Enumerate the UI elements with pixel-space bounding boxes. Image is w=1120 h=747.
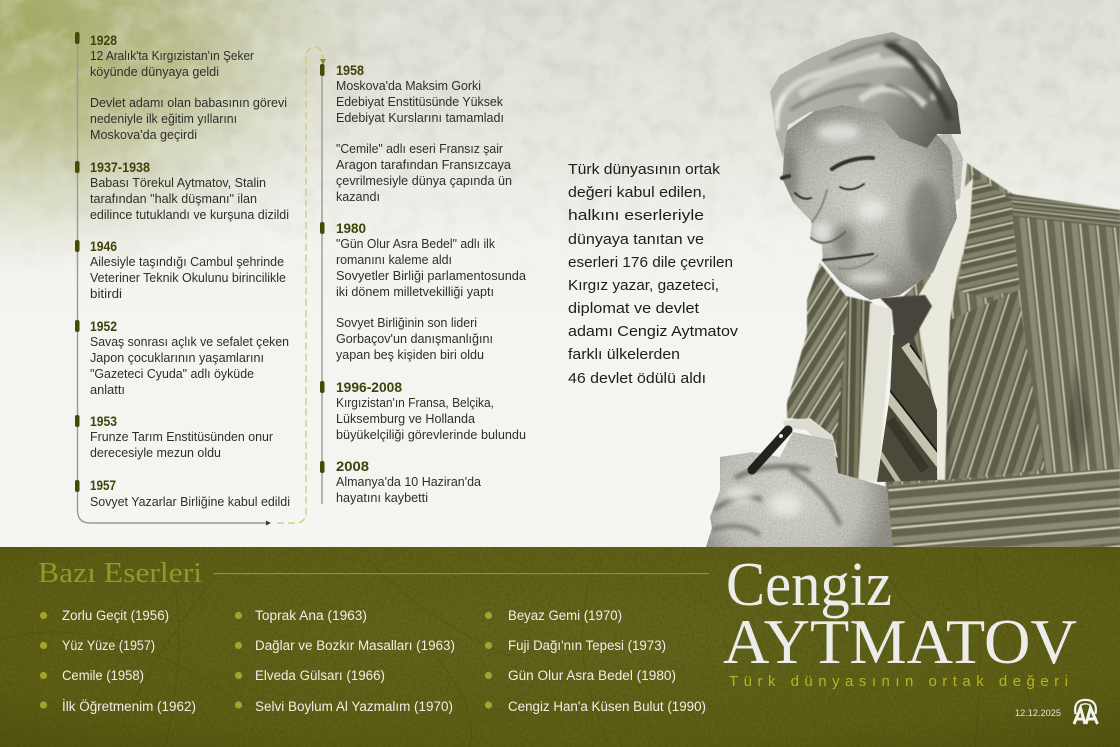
hair <box>770 32 961 158</box>
works list column 3: Cengiz Han'a Küsen Bulut (1990) <box>508 699 706 714</box>
entry 1996-2008 <box>336 380 526 442</box>
timeline arrow head <box>266 520 271 526</box>
heading rule <box>213 573 709 574</box>
timeline left column <box>90 33 290 509</box>
ear fold <box>945 145 952 185</box>
entry 1928: 12 Aralık'ta Kırgızistan'ın Şeker <box>90 49 254 63</box>
intro paragraph: dünyaya tanıtan ve <box>568 232 704 248</box>
intro paragraph: farklı ülkelerden <box>568 347 680 363</box>
entry 1980: yapan beş kişiden biri oldu <box>336 348 484 362</box>
timeline connector: solid left line <box>78 36 266 523</box>
title: AYTMATOV: AYTMATOV <box>723 606 1077 677</box>
face shadows <box>782 147 943 270</box>
works list column 1: Zorlu Geçit (1956) <box>62 608 169 623</box>
entry 1946 <box>90 239 286 301</box>
bottom panel background <box>0 547 1120 747</box>
entry 2008 <box>336 459 481 505</box>
entry 1980: "Gün Olur Asra Bedel" adlı ilk <box>336 237 496 251</box>
entry 1928 <box>90 33 287 142</box>
face <box>782 105 957 300</box>
entry 1996-2008: Kırgızistan'ın Fransa, Belçika, <box>336 396 494 410</box>
entry 1937-1938: edilince tutuklandı ve kurşuna dizildi <box>90 208 289 222</box>
facial features <box>782 158 878 269</box>
jacket back and shoulder <box>880 163 1120 547</box>
entry 1946: Veteriner Teknik Okulunu birincilikle <box>90 271 286 285</box>
entry 1958 <box>336 63 512 204</box>
entry 1937-1938: 1937-1938 <box>90 160 150 175</box>
section heading: Bazı Eserleri: Bazı Eserleri <box>38 557 202 589</box>
shoulder yoke <box>1005 193 1120 228</box>
works list column 1 <box>40 608 196 714</box>
entry 1937-1938: tarafından "halk düşmanı" ilan <box>90 192 257 206</box>
entry 1952: "Gazeteci Cyuda" adlı öyküde <box>90 367 254 381</box>
intro paragraph: adamı Cengiz Aytmatov <box>568 324 739 340</box>
entry 1958: Aragon tarafından Fransızcaya <box>336 158 511 172</box>
works list column 3 <box>485 608 706 714</box>
entry 1957: 1957 <box>90 478 116 493</box>
entry 1953: Frunze Tarım Enstitüsünden onur <box>90 430 273 444</box>
entry 1952: Japon çocuklarının yaşamlarını <box>90 351 264 365</box>
entry 1928: nedeniyle ilk eğitim yıllarını <box>90 112 237 126</box>
subtitle: Türk dünyasının ortak değeri <box>729 673 1068 690</box>
entry 1958: Edebiyat Kurslarını tamamladı <box>336 111 504 125</box>
intro paragraph: halkını eserleriyle <box>568 208 704 224</box>
entry 1980: 1980 <box>336 221 366 236</box>
works list column 2 <box>235 608 455 714</box>
entry 1928: köyünde dünyaya geldi <box>90 65 219 79</box>
hand highlights <box>726 487 801 516</box>
entry 1952: 1952 <box>90 319 117 334</box>
left arm <box>787 263 848 445</box>
entry 2008: Almanya'da 10 Haziran'da <box>336 475 481 489</box>
entry 1952 <box>90 319 289 397</box>
entry 1946: Ailesiyle taşındığı Cambul şehrinde <box>90 255 284 269</box>
entry 1946: 1946 <box>90 239 117 254</box>
entry 1953: derecesiyle mezun oldu <box>90 446 221 460</box>
cheek and forehead highlights <box>812 123 890 284</box>
entry 1958: çevrilmesiyle dünya çapında ün <box>336 174 512 188</box>
pen <box>752 430 788 470</box>
entry 1946: bitirdi <box>90 287 122 301</box>
knuckle shading <box>712 466 840 535</box>
entry 1958: kazandı <box>336 190 380 204</box>
jacket fold shadows <box>944 320 1090 480</box>
timeline right column <box>336 63 526 505</box>
title: Cengiz: Cengiz <box>726 551 892 619</box>
pen clip <box>779 434 783 438</box>
works list column 2: Selvi Boylum Al Yazmalım (1970) <box>255 699 453 714</box>
entry 1928: Devlet adamı olan babasının görevi <box>90 96 287 110</box>
entry 1952: anlattı <box>90 383 125 397</box>
intro paragraph: Kırgız yazar, gazeteci, <box>568 278 719 294</box>
timeline markers <box>75 32 324 492</box>
dashed connector between columns <box>277 47 323 523</box>
jacket upper lapel <box>957 174 1020 298</box>
entry 1953: 1953 <box>90 414 117 429</box>
background: textured paper with green wash <box>0 0 1120 264</box>
entry 1958: Moskova'da Maksim Gorki <box>336 79 481 93</box>
entry 1953 <box>90 414 273 460</box>
entry 1980: Sovyet Birliğinin son lideri <box>336 316 477 330</box>
intro paragraph: diplomat ve devlet <box>568 301 699 317</box>
works list column 1: İlk Öğretmenim (1962) <box>62 699 196 714</box>
entry 2008: 2008 <box>336 459 370 474</box>
entry 1928: 1928 <box>90 33 117 48</box>
entry 1958: Edebiyat Enstitüsünde Yüksek <box>336 95 504 109</box>
entry 1958: "Cemile" adlı eseri Fransız şair <box>336 142 503 156</box>
works list column 3: Beyaz Gemi (1970) <box>508 608 622 623</box>
intro paragraph: 46 devlet ödülü aldı <box>568 371 706 387</box>
works list column 2: Elveda Gülsarı (1966) <box>255 668 385 683</box>
timeline right line <box>321 66 323 504</box>
entry 1980: iki dönem milletvekilliği yaptı <box>336 285 494 299</box>
entry 1980 <box>336 221 526 362</box>
entry 1957 <box>90 478 290 509</box>
intro paragraph <box>568 162 739 387</box>
entry 1980: Sovyetler Birliği parlamentosunda <box>336 269 526 283</box>
entry 1952: Savaş sonrası açlık ve sefalet çeken <box>90 335 289 349</box>
necktie <box>877 335 937 482</box>
shirt right and collar <box>917 178 973 480</box>
intro paragraph: Türk dünyasının ortak <box>568 162 721 178</box>
date: 12.12.2025 <box>1015 708 1061 719</box>
works list column 1: Yüz Yüze (1957) <box>62 638 155 653</box>
jacket left chest <box>830 296 872 482</box>
dashed arrow head <box>320 59 326 65</box>
entry 1937-1938 <box>90 160 289 222</box>
works list column 3: Gün Olur Asra Bedel (1980) <box>508 668 676 683</box>
ear <box>930 132 963 205</box>
works list column 2: Toprak Ana (1963) <box>255 608 367 623</box>
portrait: Cengiz Aytmatov writing <box>700 28 1120 550</box>
entry 1980: Gorbaçov'un danışmanlığını <box>336 332 493 346</box>
intro paragraph: eserleri 176 dile çevrilen <box>568 255 733 271</box>
entry 1957: Sovyet Yazarlar Birliğine kabul edildi <box>90 495 290 509</box>
cuff <box>783 418 838 458</box>
entry 1996-2008: 1996-2008 <box>336 380 403 395</box>
intro paragraph: değeri kabul edilen, <box>568 185 706 201</box>
works list column 2: Dağlar ve Bozkır Masalları (1963) <box>255 638 455 653</box>
tie knot <box>880 295 932 345</box>
chest panel <box>945 290 1045 480</box>
entry 1928: Moskova'da geçirdi <box>90 128 197 142</box>
sleeve <box>888 468 1120 547</box>
works list column 3: Fuji Dağı'nın Tepesi (1973) <box>508 638 666 653</box>
hair strands <box>775 40 950 130</box>
shirt left strip <box>858 303 893 481</box>
entry 2008: hayatını kaybetti <box>336 491 428 505</box>
entry 1996-2008: Lüksemburg ve Hollanda <box>336 412 475 426</box>
writing hand <box>706 432 893 547</box>
entry 1958: 1958 <box>336 63 364 78</box>
logo: AA <box>1074 700 1098 724</box>
entry 1937-1938: Babası Törekul Aytmatov, Stalin <box>90 176 266 190</box>
entry 1980: romanını kaleme aldı <box>336 253 452 267</box>
entry 1996-2008: büyükelçiliği görevlerinde bulundu <box>336 428 526 442</box>
works list column 1: Cemile (1958) <box>62 668 144 683</box>
